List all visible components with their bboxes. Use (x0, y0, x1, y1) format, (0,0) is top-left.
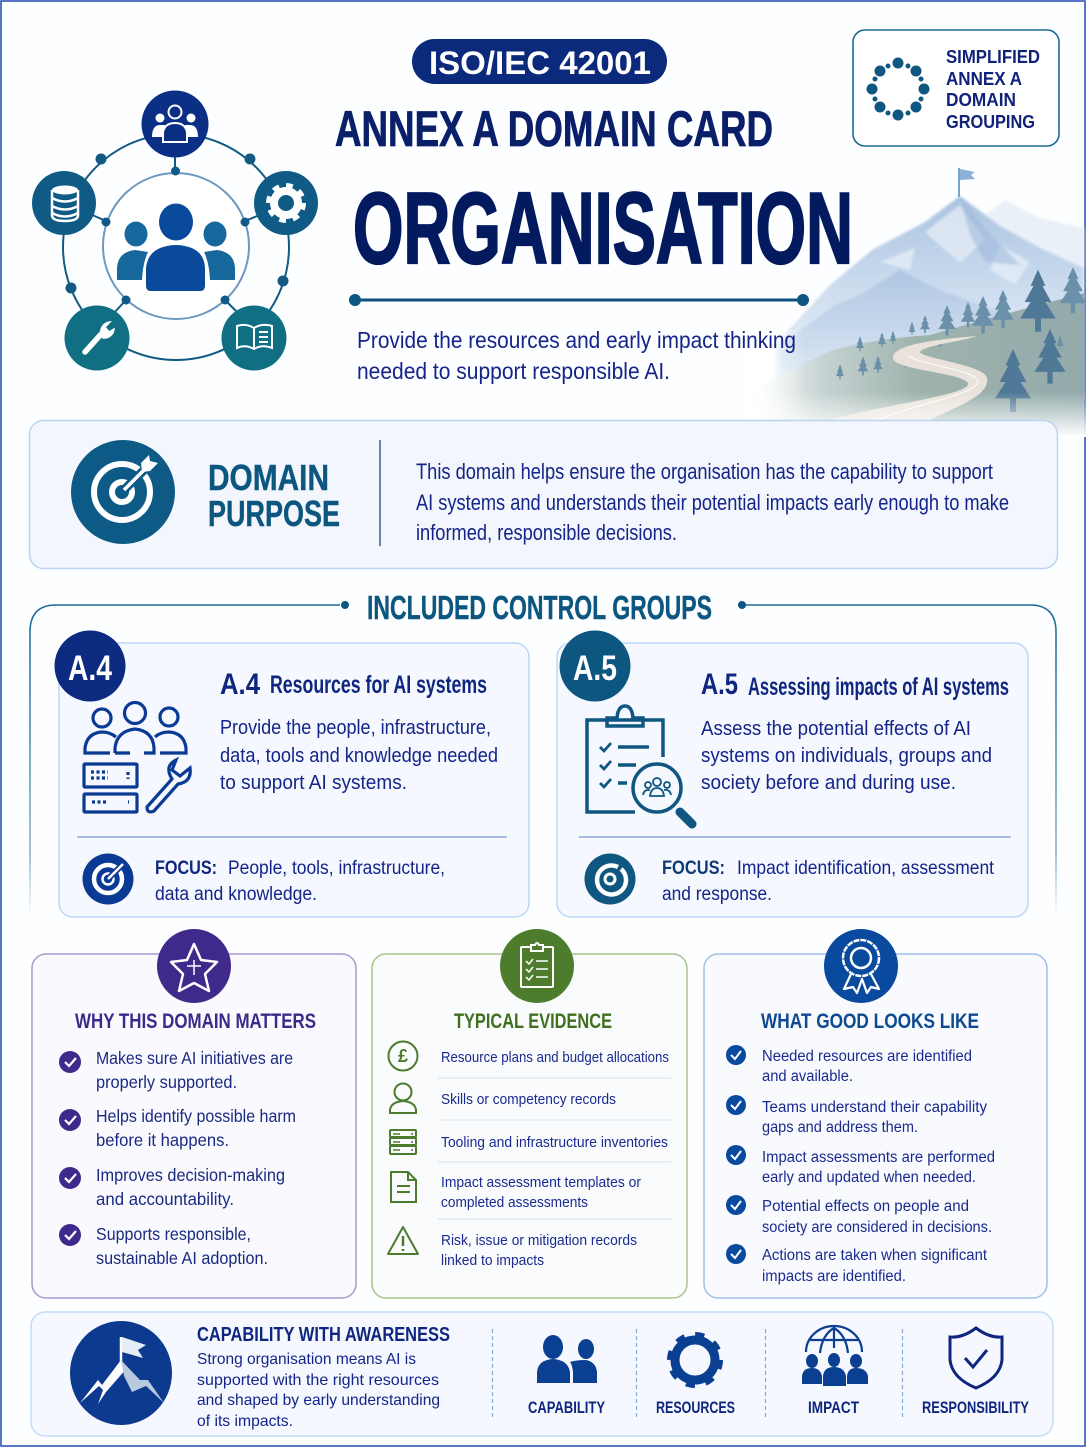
icon: people node (142, 90, 208, 158)
callout text: GROUPING (946, 112, 1035, 132)
network icon: people and resources (32, 90, 318, 370)
tagline: needed to support responsible AI. (357, 358, 670, 384)
icon: clipboard (500, 929, 574, 1003)
heading: why this domain matters: WHY THIS DOMAIN MATTERS (75, 1009, 316, 1033)
text: evidence list: Impact assessment templates or (441, 1175, 641, 1191)
panel: capability with awareness (31, 1312, 1053, 1436)
icon: impact globe and people (802, 1326, 868, 1386)
text: capability with awareness: Strong organisation means AI is (197, 1351, 416, 1368)
text: evidence list: Tooling and infrastructure inventories (441, 1135, 668, 1151)
text: A.5 description (701, 718, 992, 794)
title underline (349, 294, 809, 306)
title: A.4: Resources for AI systems (270, 671, 487, 699)
text: A.4 focus (155, 858, 445, 905)
icon: award rosette (824, 929, 898, 1003)
icon: book node (222, 306, 286, 370)
text: capability with awareness: of its impacts. (197, 1413, 293, 1430)
bullet list: Makes sure AI initiatives are (96, 1048, 293, 1068)
panel: A.5 assessing impacts of AI systems (557, 630, 1028, 917)
text: evidence list: linked to impacts (441, 1253, 544, 1269)
title: A.4 (220, 668, 487, 701)
labels: capability, resources, impact, responsibility: RESPONSIBILITY (922, 1398, 1029, 1417)
bullet list: Helps identify possible harm (96, 1106, 296, 1126)
badge: A.4: A.4 (68, 649, 112, 688)
bullet list: Actions are taken when significant (762, 1247, 988, 1264)
callout text (946, 47, 1040, 132)
bullet list: impacts are identified. (762, 1268, 906, 1285)
text: purpose statement: informed, responsible decisions. (416, 520, 677, 545)
heading: domain purpose: PURPOSE (208, 493, 340, 534)
text: evidence list: Skills or competency records (441, 1092, 616, 1108)
icons: evidence items (388, 1042, 418, 1254)
panel: typical evidence (372, 929, 687, 1298)
heading: what good looks like: WHAT GOOD LOOKS LIKE (761, 1009, 979, 1033)
title: annex a domain card: ANNEX A DOMAIN CARD (335, 101, 773, 157)
text: A.4 focus: data and knowledge. (155, 884, 317, 905)
icon: star (157, 929, 231, 1003)
bullet list: society are considered in decisions. (762, 1219, 992, 1236)
text: capability with awareness: and shaped by early understanding (197, 1392, 440, 1409)
title: A.4: A.4 (220, 668, 260, 701)
section frame: included control groups (30, 589, 1056, 915)
panel: domain purpose (30, 420, 1058, 568)
labels: capability, resources, impact, responsibility: IMPACT (808, 1398, 859, 1417)
heading: domain purpose: DOMAIN (208, 457, 329, 498)
icon: ring of dots (866, 58, 930, 120)
heading: domain purpose (208, 457, 340, 534)
panel: why this domain matters (32, 929, 356, 1298)
heading: typical evidence: TYPICAL EVIDENCE (454, 1009, 612, 1033)
header badge: ISO/IEC 42001: ISO/IEC 42001 (429, 45, 651, 81)
icon: gear node (254, 171, 318, 235)
icon: pound sign: £ (398, 1046, 408, 1066)
icon: clipboard with magnifier (587, 706, 692, 824)
text: A.5 focus (662, 858, 995, 905)
badge: A.5: A.5 (573, 649, 617, 688)
text: A.5 description: society before and during use. (701, 772, 956, 794)
bullet list: Teams understand their capability (762, 1099, 987, 1116)
badge: A.5 (560, 630, 630, 702)
labels: capability, resources, impact, responsibility: RESOURCES (656, 1398, 735, 1417)
icon: central people (117, 204, 235, 291)
text: A.5 description: Assess the potential effects of AI (701, 718, 971, 740)
text: evidence list: Resource plans and budget allocations (441, 1050, 669, 1066)
text: capability with awareness: supported with the right resources (197, 1372, 439, 1389)
labels: capability, resources, impact, responsibility: CAPABILITY (528, 1398, 605, 1417)
tagline (357, 327, 796, 384)
bullet list: gaps and address them. (762, 1119, 918, 1136)
text: A.4 description: to support AI systems. (220, 772, 407, 794)
bullet list (726, 1045, 995, 1285)
text: capability with awareness (197, 1324, 450, 1430)
bullet list: early and updated when needed. (762, 1169, 976, 1186)
header badge: ISO/IEC 42001 (412, 39, 667, 84)
icon: database node (32, 171, 96, 235)
text: A.5 focus: FOCUS: (662, 858, 725, 879)
icon: A.4 focus target (82, 854, 134, 904)
labels: capability, resources, impact, responsibility (528, 1398, 1029, 1417)
bullet list: Potential effects on people and (762, 1198, 969, 1215)
illustration: mountain with flag, forest and winding road (745, 168, 1086, 437)
tagline: Provide the resources and early impact thinking (357, 327, 796, 353)
bullet list: before it happens. (96, 1130, 229, 1150)
text: evidence list: Risk, issue or mitigation records (441, 1233, 637, 1249)
title: A.5: A.5 (701, 668, 738, 701)
text: A.5 focus: and response. (662, 884, 772, 905)
callout: simplified annex a domain grouping (853, 30, 1059, 146)
text: A.4 focus: People, tools, infrastructure, (228, 858, 445, 879)
text: capability with awareness: CAPABILITY WITH AWARENESS (197, 1324, 450, 1346)
text: A.5 description: systems on individuals, groups and (701, 745, 992, 767)
bullet list: Impact assessments are performed (762, 1149, 995, 1166)
bullet list: Needed resources are identified (762, 1048, 972, 1065)
panel: what good looks like (704, 929, 1047, 1298)
bullet list: Supports responsible, (96, 1224, 251, 1244)
callout text: DOMAIN (946, 90, 1016, 110)
bullet list: sustainable AI adoption. (96, 1248, 268, 1268)
icon: resources gear (670, 1335, 720, 1385)
callout text: ANNEX A (946, 69, 1022, 89)
badge: A.4 (54, 630, 126, 702)
panel: A.4 resources for AI systems (54, 630, 529, 917)
text: evidence list (441, 1050, 669, 1269)
icon: people, servers and wrench (84, 702, 190, 812)
text: A.5 focus: Impact identification, assessment (737, 858, 995, 879)
text: A.4 focus: FOCUS: (155, 858, 217, 879)
bullet list: properly supported. (96, 1072, 237, 1092)
bullet list (59, 1048, 296, 1268)
icon: wrench node (64, 306, 130, 370)
heading: included control groups: INCLUDED CONTROL GROUPS (367, 589, 712, 626)
bullet list: Improves decision-making (96, 1165, 285, 1185)
icon: capability people (537, 1335, 597, 1383)
text: purpose statement (416, 459, 1009, 545)
text: A.4 description (220, 717, 498, 794)
bullet list: and accountability. (96, 1189, 234, 1209)
icon: target (71, 440, 175, 544)
title: A.5 (701, 668, 1009, 701)
callout text: SIMPLIFIED (946, 47, 1040, 67)
icon: responsibility shield (950, 1328, 1002, 1388)
icon: A.5 focus target (584, 854, 636, 904)
text: A.4 description: Provide the people, infrastructure, (220, 717, 491, 739)
text: A.4 description: data, tools and knowledge needed (220, 745, 498, 767)
icon: mountain and flag (70, 1321, 172, 1425)
text: evidence list: completed assessments (441, 1195, 588, 1211)
bullet list: and available. (762, 1068, 853, 1085)
